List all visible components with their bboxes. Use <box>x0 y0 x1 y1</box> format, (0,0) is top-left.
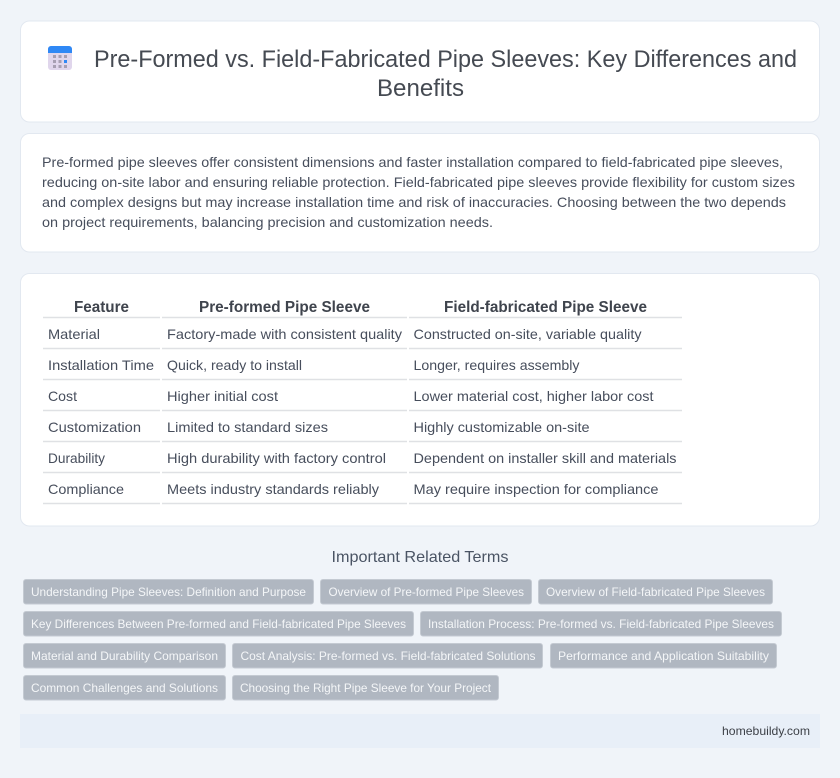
tag <box>24 676 226 700</box>
panel: header <box>20 21 820 122</box>
footer: homebuildy.com <box>722 724 810 738</box>
row: durability <box>48 450 676 466</box>
tag: Installation Process: Pre-formed vs. Field-fabricated Pipe Sleeves <box>428 617 774 631</box>
row: installation time: Longer, requires assembly <box>414 357 580 373</box>
tag <box>550 644 776 668</box>
table header <box>74 299 647 316</box>
tag: Cost Analysis: Pre-formed vs. Field-fabricated Solutions <box>240 649 536 663</box>
tag <box>320 580 532 604</box>
tag: Understanding Pipe Sleeves: Definition and Purpose <box>31 585 306 599</box>
row: material: Factory-made with consistent quality <box>167 326 402 342</box>
panel: comparison table <box>20 274 820 526</box>
row: cost: Cost <box>48 388 77 404</box>
row: compliance: Compliance <box>48 481 124 497</box>
tag <box>24 644 226 668</box>
tag: Overview of Pre-formed Pipe Sleeves <box>328 585 524 599</box>
table header: Field-fabricated Pipe Sleeve <box>444 299 647 316</box>
row: cost <box>48 388 654 404</box>
title: Benefits <box>377 75 464 102</box>
table header: Feature <box>74 299 129 316</box>
row: customization <box>48 419 590 435</box>
title <box>94 46 797 102</box>
icon: calendar <box>48 46 72 70</box>
panel: introduction text <box>20 134 820 252</box>
tag: Common Challenges and Solutions <box>31 681 218 695</box>
row: compliance: Meets industry standards reliably <box>167 481 379 497</box>
panel: introduction text: reducing on-site labor and ensuring reliable protection. Field-fabricated pipe sleeves provide flexibility for custom sizes <box>42 174 795 190</box>
tag <box>232 644 542 668</box>
row: material <box>48 326 642 342</box>
related term tags <box>24 580 782 700</box>
tag: Overview of Field-fabricated Pipe Sleeves <box>546 585 765 599</box>
row: compliance: May require inspection for compliance <box>414 481 659 497</box>
table header: Pre-formed Pipe Sleeve <box>199 299 370 316</box>
footer <box>20 714 820 748</box>
row: material: Material <box>48 326 100 342</box>
title: Pre-Formed vs. Field-Fabricated Pipe Sleeves: Key Differences and <box>94 46 797 73</box>
tag: Key Differences Between Pre-formed and Field-fabricated Pipe Sleeves <box>31 617 406 631</box>
row: cost: Lower material cost, higher labor cost <box>414 388 654 404</box>
row: customization: Customization <box>48 419 141 435</box>
row: customization: Highly customizable on-site <box>414 419 590 435</box>
heading: important related terms: Important Related Terms <box>332 549 508 566</box>
row: durability: Durability <box>48 450 105 466</box>
panel: introduction text: Pre-formed pipe sleeves offer consistent dimensions and faster installation compared to field-fabricated pipe sleeves, <box>42 154 783 170</box>
row: cost: Higher initial cost <box>167 388 278 404</box>
tag: Choosing the Right Pipe Sleeve for Your Project <box>240 681 492 695</box>
row: compliance <box>48 481 659 497</box>
tag <box>24 580 314 604</box>
tag: Material and Durability Comparison <box>31 649 218 663</box>
tag <box>420 612 782 636</box>
row: installation time: Quick, ready to install <box>167 357 302 373</box>
row: customization: Limited to standard sizes <box>167 419 328 435</box>
tag: Performance and Application Suitability <box>558 649 769 663</box>
row: material: Constructed on-site, variable quality <box>414 326 642 342</box>
tag <box>538 580 772 604</box>
tag <box>24 612 414 636</box>
row: installation time <box>48 357 580 373</box>
panel: introduction text: on project requirements, balancing precision and customization needs. <box>42 214 493 230</box>
tag <box>232 676 498 700</box>
row: installation time: Installation Time <box>48 357 154 373</box>
row: durability: High durability with factory control <box>167 450 386 466</box>
panel: introduction text: and complex designs but may increase installation time and risk of inaccuracies. Choosing between the two depends <box>42 194 786 210</box>
row: durability: Dependent on installer skill and materials <box>414 450 676 466</box>
